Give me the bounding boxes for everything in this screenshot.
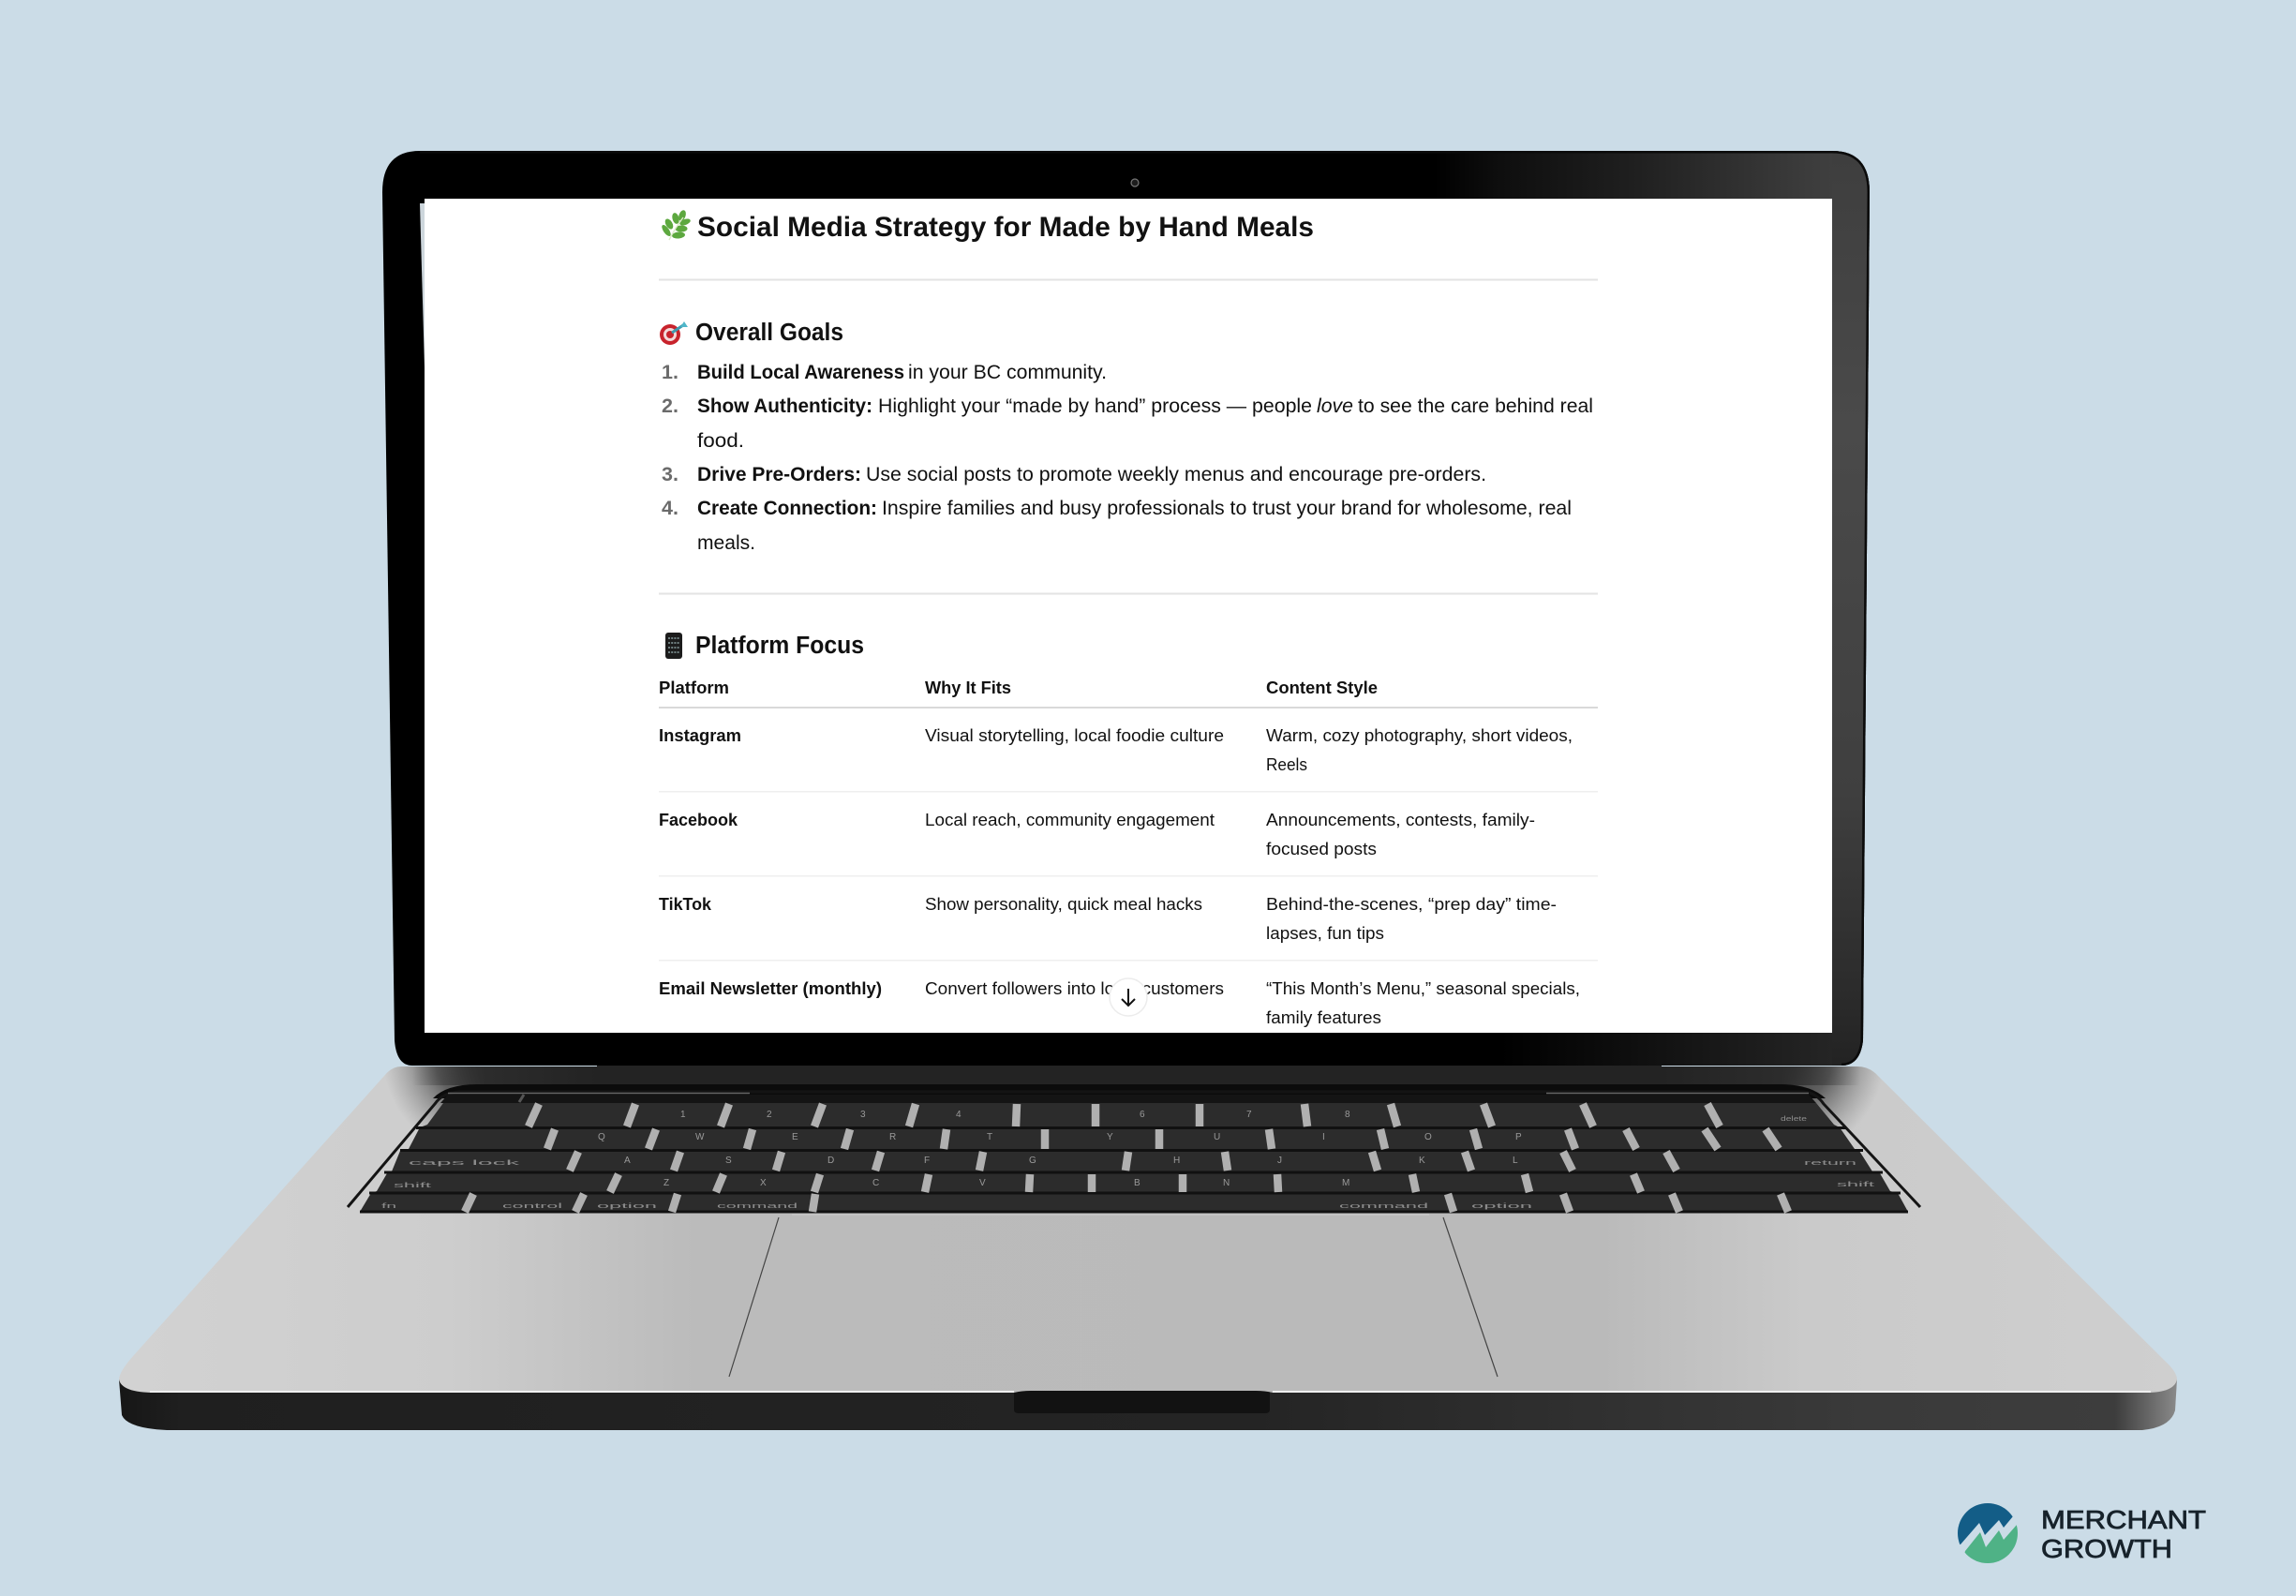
key legends: option bbox=[1471, 1203, 1532, 1210]
platform table: Facebook bbox=[659, 810, 738, 829]
goals list: Inspire families and busy professionals to trust your brand for wholesome, real bbox=[882, 497, 1572, 519]
goals list: Highlight your “made by hand” process — people bbox=[878, 395, 1312, 417]
key legends: return bbox=[1804, 1160, 1856, 1167]
key legends: 4 bbox=[956, 1110, 962, 1120]
title: Social Media Strategy for Made by Hand Meals bbox=[697, 212, 1314, 243]
key legends: control bbox=[502, 1203, 563, 1210]
key legends: 2 bbox=[767, 1110, 772, 1120]
key legends: H bbox=[1173, 1156, 1180, 1166]
key legends: L bbox=[1513, 1156, 1518, 1166]
key legends: J bbox=[1277, 1156, 1282, 1166]
platform table: “This Month’s Menu,” seasonal specials, bbox=[1266, 978, 1580, 998]
trackpad bbox=[729, 1215, 1498, 1377]
platform table: focused posts bbox=[1266, 839, 1377, 858]
key legends: shift bbox=[394, 1183, 431, 1189]
platform table: Reels bbox=[1266, 754, 1307, 774]
logo: merchant growth bbox=[1958, 1503, 2206, 1563]
base front edge bbox=[119, 1380, 2177, 1430]
key legends: R bbox=[889, 1132, 896, 1142]
icon: herb bbox=[661, 209, 692, 240]
front notch bbox=[1014, 1391, 1270, 1413]
key legends: fn bbox=[381, 1203, 396, 1210]
goals list: 2. bbox=[662, 395, 678, 417]
key legends: M bbox=[1342, 1178, 1349, 1188]
keyboard bbox=[348, 1092, 1920, 1212]
platform table: Content Style bbox=[1266, 678, 1378, 697]
icon: target bbox=[660, 321, 688, 345]
key legends: I bbox=[1322, 1132, 1325, 1142]
screen bbox=[420, 199, 1832, 1033]
goals list: Create Connection: bbox=[697, 497, 877, 519]
webcam bbox=[1131, 179, 1139, 186]
platform table: Convert followers into local customers bbox=[925, 978, 1224, 998]
screen edge sliver bbox=[420, 203, 425, 367]
heading: overall goals: Overall Goals bbox=[695, 320, 843, 346]
key legends: C bbox=[872, 1178, 879, 1188]
goals list: food. bbox=[697, 429, 744, 452]
laptop base bbox=[119, 1066, 2177, 1430]
platform table: Why It Fits bbox=[925, 678, 1011, 697]
hinge shadows bbox=[412, 1066, 597, 1085]
key legends: G bbox=[1029, 1156, 1036, 1166]
platform table: Email Newsletter (monthly) bbox=[659, 978, 882, 998]
key legends: 1 bbox=[680, 1110, 686, 1120]
goals list: Drive Pre-Orders: bbox=[697, 463, 861, 485]
key legends: A bbox=[624, 1156, 631, 1166]
key legends: B bbox=[1134, 1178, 1141, 1188]
key legends: D bbox=[827, 1156, 834, 1166]
lid reflections bbox=[420, 151, 1874, 1069]
logo: merchant growth: GROWTH bbox=[2041, 1534, 2172, 1563]
key legends: Z bbox=[663, 1178, 669, 1188]
platform table: Warm, cozy photography, short videos, bbox=[1266, 725, 1573, 745]
goals list: to see the care behind real bbox=[1358, 395, 1593, 417]
logo wordmark: MERCHANT bbox=[2041, 1505, 2206, 1534]
key legends bbox=[381, 1110, 1874, 1210]
section: platform focus bbox=[659, 633, 1598, 1027]
key legends: Q bbox=[598, 1132, 605, 1142]
key legends: P bbox=[1515, 1132, 1522, 1142]
platform table: Announcements, contests, family- bbox=[1266, 810, 1535, 829]
key legends: V bbox=[979, 1178, 986, 1188]
heading: platform focus: Platform Focus bbox=[695, 633, 864, 659]
key legends: 8 bbox=[1345, 1110, 1350, 1120]
goals list: 4. bbox=[662, 497, 678, 519]
platform table: family features bbox=[1266, 1007, 1381, 1027]
shading near hinge bbox=[390, 1066, 1878, 1132]
key legends: delete bbox=[1781, 1116, 1807, 1123]
key legends: W bbox=[695, 1132, 705, 1142]
key legends: U bbox=[1214, 1132, 1220, 1142]
divider bbox=[659, 592, 1598, 594]
key legends: X bbox=[760, 1178, 767, 1188]
logo mark bbox=[1958, 1503, 2018, 1563]
key legends: K bbox=[1419, 1156, 1425, 1166]
platform table: lapses, fun tips bbox=[1266, 923, 1384, 943]
platform table: Instagram bbox=[659, 725, 741, 745]
platform table: TikTok bbox=[659, 894, 712, 914]
key legends: S bbox=[725, 1156, 732, 1166]
platform table: Visual storytelling, local foodie culture bbox=[925, 725, 1224, 745]
key legends: caps lock bbox=[409, 1160, 521, 1167]
divider bbox=[659, 279, 1598, 281]
goals list: 3. bbox=[662, 463, 678, 485]
goals list: Show Authenticity: bbox=[697, 395, 872, 417]
key legends: O bbox=[1424, 1132, 1432, 1142]
hinge bar bbox=[597, 1066, 1662, 1085]
goals list: Build Local Awareness bbox=[697, 361, 904, 383]
goals list: meals. bbox=[697, 531, 755, 554]
platform table: Local reach, community engagement bbox=[925, 810, 1215, 829]
goals list: in your BC community. bbox=[908, 361, 1107, 383]
goals list bbox=[662, 361, 1593, 554]
key legends: command bbox=[1339, 1203, 1428, 1210]
key legends: option bbox=[597, 1203, 657, 1210]
key legends: N bbox=[1223, 1178, 1230, 1188]
platform table: Behind-the-scenes, “prep day” time- bbox=[1266, 894, 1557, 914]
platform table: Platform bbox=[659, 678, 729, 697]
key legends: 6 bbox=[1140, 1110, 1145, 1120]
base top surface bbox=[119, 1066, 2177, 1393]
key legends: shift bbox=[1837, 1182, 1874, 1188]
laptop lid bbox=[382, 151, 1874, 1098]
base front highlight bbox=[150, 1391, 2151, 1393]
platform table: Show personality, quick meal hacks bbox=[925, 894, 1202, 914]
key legends: T bbox=[987, 1132, 992, 1142]
key legends: Y bbox=[1107, 1132, 1113, 1142]
goals list: love bbox=[1317, 395, 1353, 417]
goals list: 1. bbox=[662, 361, 678, 383]
key legends: F bbox=[924, 1156, 930, 1166]
goals list: Use social posts to promote weekly menus and encourage pre-orders. bbox=[866, 463, 1486, 485]
key legends: command bbox=[717, 1203, 798, 1210]
icon: phone bbox=[665, 633, 682, 659]
platform table bbox=[659, 678, 1598, 1027]
section: overall goals bbox=[660, 320, 1593, 554]
key legends: E bbox=[792, 1132, 798, 1142]
key legends: 3 bbox=[860, 1110, 866, 1120]
key legends: 7 bbox=[1246, 1110, 1252, 1120]
scroll-down button bbox=[1110, 978, 1147, 1016]
